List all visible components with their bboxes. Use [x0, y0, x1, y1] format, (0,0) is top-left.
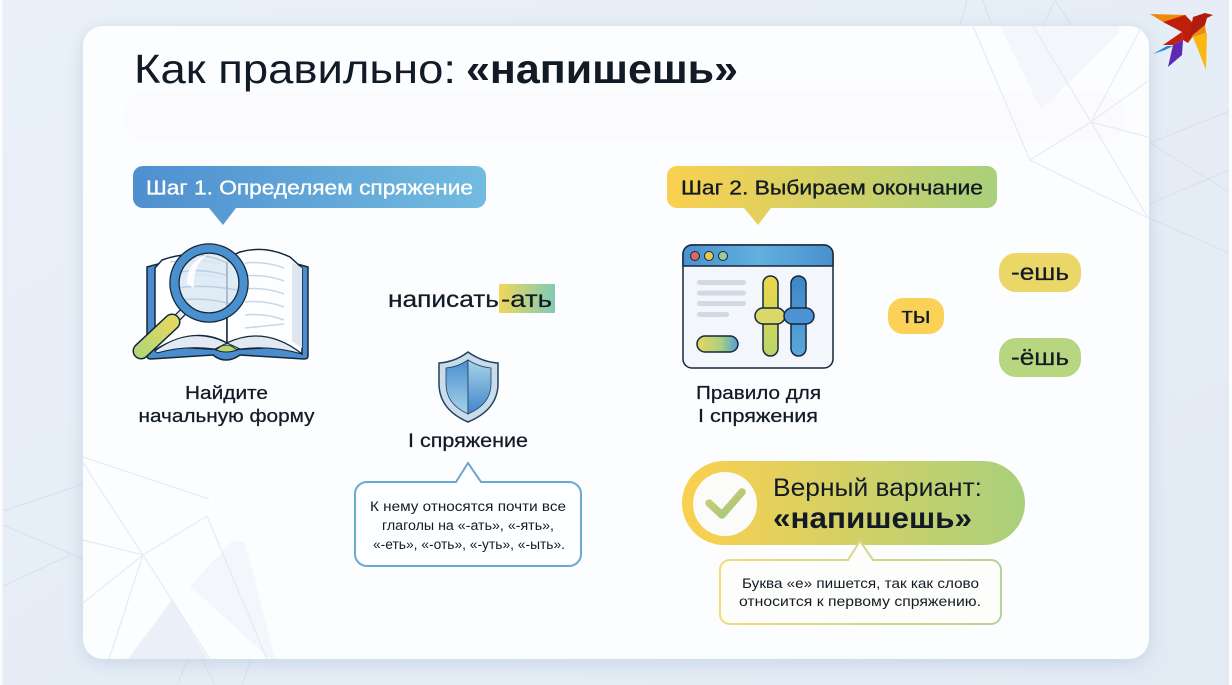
word: написать with highlighted ending: [388, 284, 555, 313]
label: rule for first conjugation: I спряжения: [698, 406, 818, 426]
pill: ты: [888, 298, 944, 334]
icon: settings window with sliders: [683, 245, 833, 368]
callout: explanation: относится к первому спряжению.: [739, 593, 981, 609]
pill: -ёшь: [999, 338, 1081, 377]
logo: swallow bird: [1150, 13, 1213, 70]
callout: explanation: Буква «е» пишется, так как слово: [742, 575, 979, 591]
correct answer badge: Верный вариант:: [773, 474, 982, 502]
step 2 heading tag: Шаг 2. Выбираем окончание: [681, 176, 983, 200]
icon: shield: [439, 352, 498, 422]
callout: first conjugation: [355, 463, 581, 566]
callout: first conjugation: К нему относятся почти все: [370, 499, 566, 514]
callout: first conjugation: «-еть», «-оть», «-уть», «-ыть».: [373, 537, 565, 552]
pill: -ешь: -ешь: [1011, 259, 1069, 285]
correct answer badge: «напишешь»: [773, 502, 972, 535]
callout: first conjugation: глаголы на «-ать», «-ять»,: [382, 518, 554, 533]
label: rule for first conjugation: Правило для: [696, 383, 821, 403]
pill: -ешь: [999, 253, 1081, 292]
label: find infinitive: начальную форму: [138, 406, 314, 426]
word: написать with highlighted ending: -ать: [501, 286, 552, 312]
main card: [83, 26, 1149, 659]
pill: -ёшь: -ёшь: [1011, 344, 1069, 370]
title: [134, 46, 738, 92]
correct answer badge: [682, 461, 1025, 545]
step 1 heading tag: Шаг 1. Определяем спряжение: [146, 176, 473, 200]
label: rule for first conjugation: [696, 383, 821, 426]
icon: check mark: [693, 472, 757, 536]
icon: open book with magnifying glass: [141, 248, 308, 360]
pill: ты: ты: [902, 303, 930, 328]
label: find infinitive: [138, 383, 314, 426]
label: I спряжение: I спряжение: [408, 431, 528, 452]
step 2 heading tag: [667, 166, 997, 225]
label: find infinitive: Найдите: [185, 383, 268, 403]
step 1 heading tag: [133, 166, 486, 225]
word: написать with highlighted ending: написать: [388, 286, 499, 312]
title: «напишешь»: [466, 46, 738, 92]
callout: explanation: [720, 541, 1001, 624]
title: Как правильно:: [134, 46, 456, 92]
